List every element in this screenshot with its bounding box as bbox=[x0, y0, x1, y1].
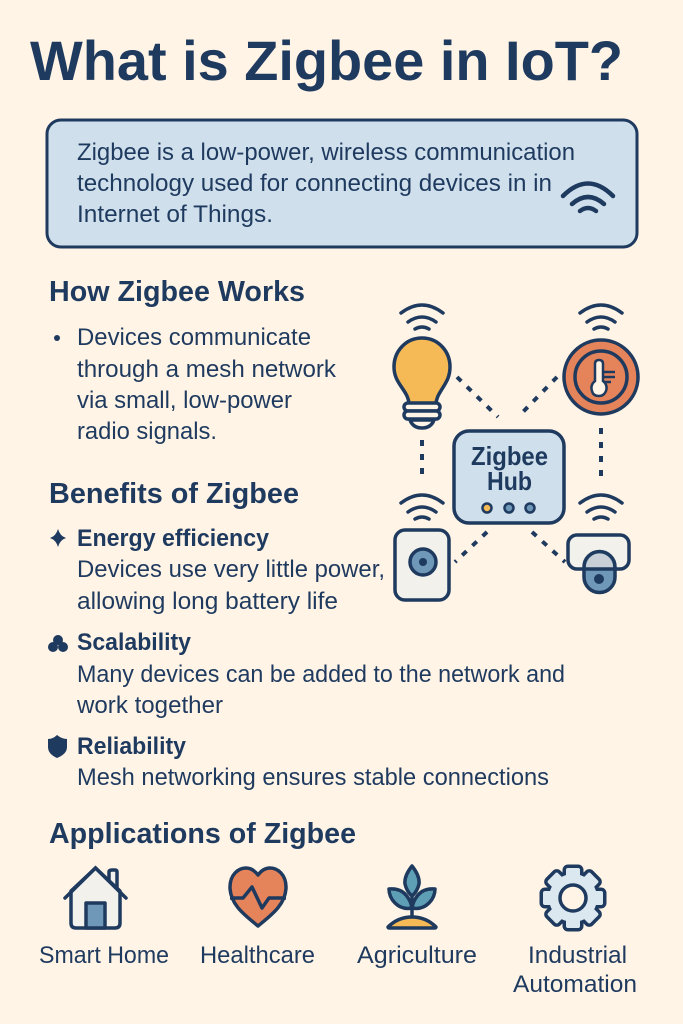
benefit: energy efficiency: Energy efficiency bbox=[77, 525, 270, 552]
icon: heart with pulse bbox=[230, 868, 286, 926]
benefit: scalability bbox=[48, 629, 565, 719]
panel: Zigbee hub bbox=[454, 431, 564, 523]
application: healthcare bbox=[200, 868, 315, 969]
icon: thermostat bbox=[564, 305, 638, 414]
title: What is Zigbee in IoT? bbox=[30, 29, 623, 92]
heading: how it works: How Zigbee Works bbox=[49, 276, 305, 308]
network diagram bbox=[394, 305, 638, 600]
panel: Zigbee hub: Hub bbox=[487, 466, 532, 496]
application: industrial automation bbox=[513, 868, 637, 998]
text block: how it works bbox=[54, 324, 337, 445]
application: industrial automation: Automation bbox=[513, 971, 637, 998]
text block: how it works: through a mesh network bbox=[77, 356, 337, 383]
text: definition bbox=[77, 139, 575, 228]
icon: three nodes bbox=[48, 635, 68, 652]
icon: shield bbox=[48, 735, 67, 758]
icon: sparkle bbox=[50, 529, 66, 547]
panel: Zigbee hub: Zigbee bbox=[471, 441, 548, 471]
benefit: energy efficiency bbox=[50, 525, 385, 615]
heading: applications: Applications of Zigbee bbox=[49, 818, 356, 850]
text block: how it works: via small, low-power bbox=[77, 387, 292, 414]
dashed mesh links bbox=[422, 377, 601, 562]
icon: house bbox=[65, 868, 126, 928]
panel: definition bbox=[47, 120, 637, 247]
icon: gear bbox=[543, 868, 603, 928]
text block: how it works: Devices communicate bbox=[77, 324, 311, 351]
icon: light bulb bbox=[394, 305, 450, 428]
application: healthcare: Healthcare bbox=[200, 942, 315, 969]
application: smart home: Smart Home bbox=[39, 942, 169, 969]
icon: wifi bbox=[563, 184, 613, 211]
text block: how it works: radio signals. bbox=[77, 418, 217, 445]
text: definition: technology used for connecting devices in in bbox=[77, 170, 552, 197]
benefit: scalability: work together bbox=[76, 692, 223, 719]
benefit: reliability: Mesh networking ensures stable connections bbox=[77, 764, 549, 791]
benefit: reliability bbox=[48, 733, 549, 791]
icon: security camera bbox=[568, 495, 629, 592]
application: smart home bbox=[39, 868, 169, 969]
application: agriculture: Agriculture bbox=[357, 942, 477, 969]
heading: benefits: Benefits of Zigbee bbox=[49, 478, 299, 510]
benefit: scalability: Many devices can be added to the network and bbox=[77, 661, 565, 688]
application: industrial automation: Industrial bbox=[528, 942, 627, 969]
benefit: energy efficiency: Devices use very little power, bbox=[77, 556, 385, 583]
benefit: scalability: Scalability bbox=[77, 629, 192, 656]
benefit: reliability: Reliability bbox=[77, 733, 187, 760]
text: definition: Internet of Things. bbox=[77, 201, 273, 228]
benefit: energy efficiency: allowing long battery life bbox=[77, 588, 338, 615]
icon: sprout bbox=[388, 866, 436, 928]
text: definition: Zigbee is a low-power, wireless communication bbox=[77, 139, 575, 166]
application: agriculture bbox=[357, 866, 477, 969]
icon: motion sensor bbox=[395, 495, 449, 600]
